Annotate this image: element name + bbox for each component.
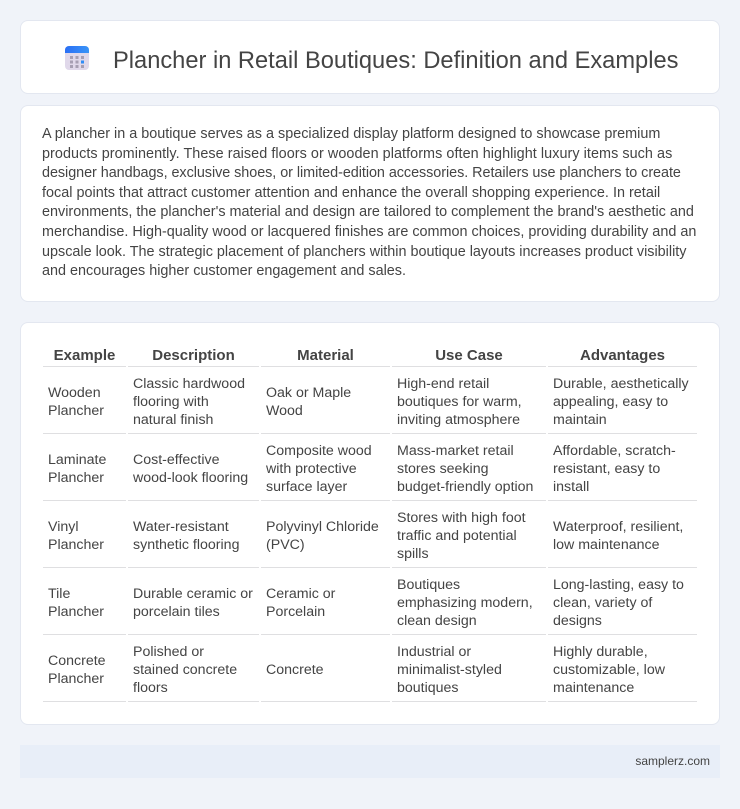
table: plancher types: Plancher <box>48 671 104 687</box>
table: plancher types: Mass-market retail <box>397 443 514 459</box>
table: plancher types: maintain <box>553 412 607 428</box>
text block: description: focal points that attract customer attention and enhance the overall shopping experience. In retail <box>42 185 660 201</box>
table: plancher types: Example <box>54 347 115 364</box>
table: plancher types: stained concrete <box>133 662 237 678</box>
table: plancher types: wood-look flooring <box>133 470 248 486</box>
text block: description: environments, the plancher's material and design are tailored to complement the brand's aesthetic and <box>42 204 694 220</box>
table: plancher types: synthetic flooring <box>133 537 239 553</box>
panel: comparison table <box>20 322 720 725</box>
panel: header <box>20 20 720 94</box>
table: plancher types: emphasizing modern, <box>397 595 533 611</box>
text block: description: designer handbags, exclusive shoes, or limited-edition accessories. Retailers use planchers to create <box>42 165 681 181</box>
table: plancher types: boutiques <box>397 680 459 696</box>
title: Plancher in Retail Boutiques: Definition and Examples <box>113 48 678 74</box>
table: plancher types: porcelain tiles <box>133 604 220 620</box>
table: plancher types: Porcelain <box>266 604 325 620</box>
table: plancher types: stores seeking <box>397 461 488 477</box>
table: plancher types: resistant, easy to <box>553 461 660 477</box>
table: plancher types: Description <box>152 347 235 364</box>
table: plancher types: traffic and potential <box>397 528 517 544</box>
table: plancher types: Tile <box>48 586 70 602</box>
table: plancher types: Concrete <box>266 662 324 678</box>
table: plancher types: Ceramic or <box>266 586 335 602</box>
table: plancher types: Water-resistant <box>133 519 229 535</box>
table: plancher types: Affordable, scratch- <box>553 443 676 459</box>
text block: description <box>42 126 696 279</box>
table: plancher types: designs <box>553 613 602 629</box>
text block: description: upscale look. The strategic placement of planchers within boutique layouts increases product visibility <box>42 244 686 260</box>
table: plancher types: Plancher <box>48 604 104 620</box>
table: plancher types <box>43 347 697 702</box>
table: plancher types: inviting atmosphere <box>397 412 520 428</box>
text block: description: products prominently. These raised floors or wooden platforms often highlight luxury items such as <box>42 146 672 162</box>
table: plancher types: Stores with high foot <box>397 510 526 526</box>
table: plancher types: floors <box>133 680 168 696</box>
table: plancher types: Oak or Maple <box>266 385 351 401</box>
panel: description <box>20 105 720 302</box>
footer bar <box>20 745 720 778</box>
table: plancher types: appealing, easy to <box>553 394 668 410</box>
table: plancher types: install <box>553 479 589 495</box>
table: plancher types: Polyvinyl Chloride <box>266 519 379 535</box>
table: plancher types: Waterproof, resilient, <box>553 519 683 535</box>
table: plancher types: Laminate <box>48 452 106 468</box>
table: plancher types: clean design <box>397 613 477 629</box>
table: plancher types: Advantages <box>580 347 665 364</box>
table: plancher types: Wooden <box>48 385 101 401</box>
table: plancher types: Classic hardwood <box>133 376 245 392</box>
table: plancher types: High-end retail <box>397 376 489 392</box>
table: plancher types: Industrial or <box>397 644 471 660</box>
table: plancher types: Plancher <box>48 537 104 553</box>
table: plancher types: Plancher <box>48 403 104 419</box>
table: plancher types: Highly durable, <box>553 644 648 660</box>
table: plancher types: Wood <box>266 403 303 419</box>
table: plancher types: Durable ceramic or <box>133 586 253 602</box>
table: plancher types: Durable, aesthetically <box>553 376 689 392</box>
table: plancher types: with protective <box>266 461 357 477</box>
table: plancher types: spills <box>397 546 429 562</box>
text block: description: A plancher in a boutique serves as a specialized display platform designed to showcase premium <box>42 126 660 142</box>
table: plancher types: Cost-effective <box>133 452 219 468</box>
table: plancher types: budget-friendly option <box>397 479 533 495</box>
table: plancher types: flooring with <box>133 394 209 410</box>
table: plancher types: surface layer <box>266 479 347 495</box>
table: plancher types: Vinyl <box>48 519 78 535</box>
table: plancher types: Concrete <box>48 653 106 669</box>
table: plancher types: Polished or <box>133 644 204 660</box>
table: plancher types: natural finish <box>133 412 213 428</box>
table: plancher types: Plancher <box>48 470 104 486</box>
table: plancher types: Boutiques <box>397 577 460 593</box>
icon: calendar <box>65 46 89 70</box>
table: plancher types: boutiques for warm, <box>397 394 522 410</box>
table: plancher types: Composite wood <box>266 443 372 459</box>
text block: description: merchandise. High-quality wood or lacquered finishes are common choices, providing durability and an <box>42 224 696 240</box>
text block: description: and encourages higher customer engagement and sales. <box>42 263 406 279</box>
table: plancher types: Use Case <box>435 347 503 364</box>
table: plancher types: Material <box>297 347 354 364</box>
table: plancher types: low maintenance <box>553 537 659 553</box>
table: plancher types: (PVC) <box>266 537 305 553</box>
table: plancher types: Long-lasting, easy to <box>553 577 684 593</box>
table: plancher types: maintenance <box>553 680 634 696</box>
table: plancher types: customizable, low <box>553 662 665 678</box>
table: plancher types: clean, variety of <box>553 595 652 611</box>
table: plancher types: minimalist-styled <box>397 662 502 678</box>
footer source: samplerz.com <box>635 754 710 768</box>
